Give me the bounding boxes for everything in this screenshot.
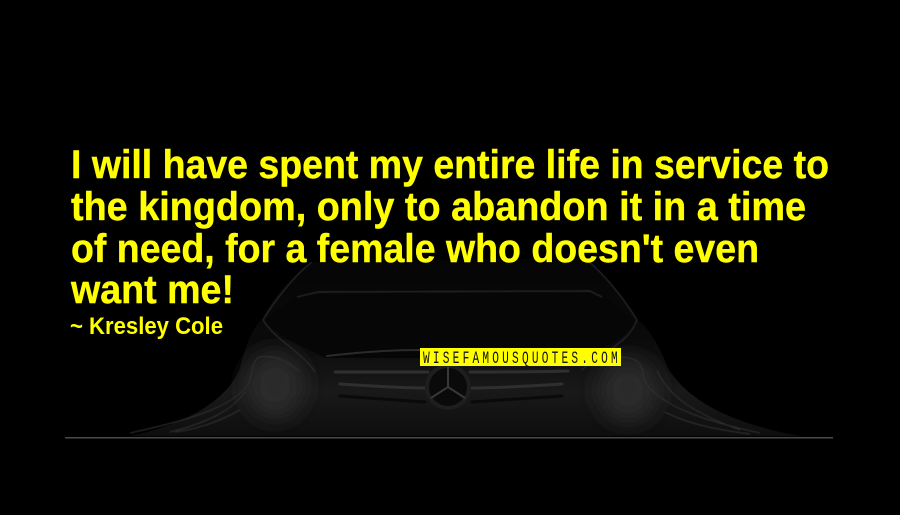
contour lines xyxy=(130,260,760,434)
quote text: I will have spent my entire life in service to xyxy=(71,143,829,187)
grille xyxy=(327,350,568,402)
fender highlights xyxy=(245,351,658,422)
quote text xyxy=(70,143,829,312)
quote text: the kingdom, only to abandon it in a time xyxy=(71,185,806,229)
car body xyxy=(130,258,800,436)
ground line xyxy=(65,437,833,438)
attribution: ~ Kresley Cole xyxy=(70,313,223,340)
car silhouette xyxy=(130,258,800,436)
watermark badge: WISEFAMOUSQUOTES.COM xyxy=(423,350,618,369)
quote text: of need, for a female who doesn't even xyxy=(71,227,759,271)
icon: three-pointed star emblem xyxy=(427,366,469,408)
quote text: want me! xyxy=(70,268,234,312)
hood interior xyxy=(265,293,634,358)
